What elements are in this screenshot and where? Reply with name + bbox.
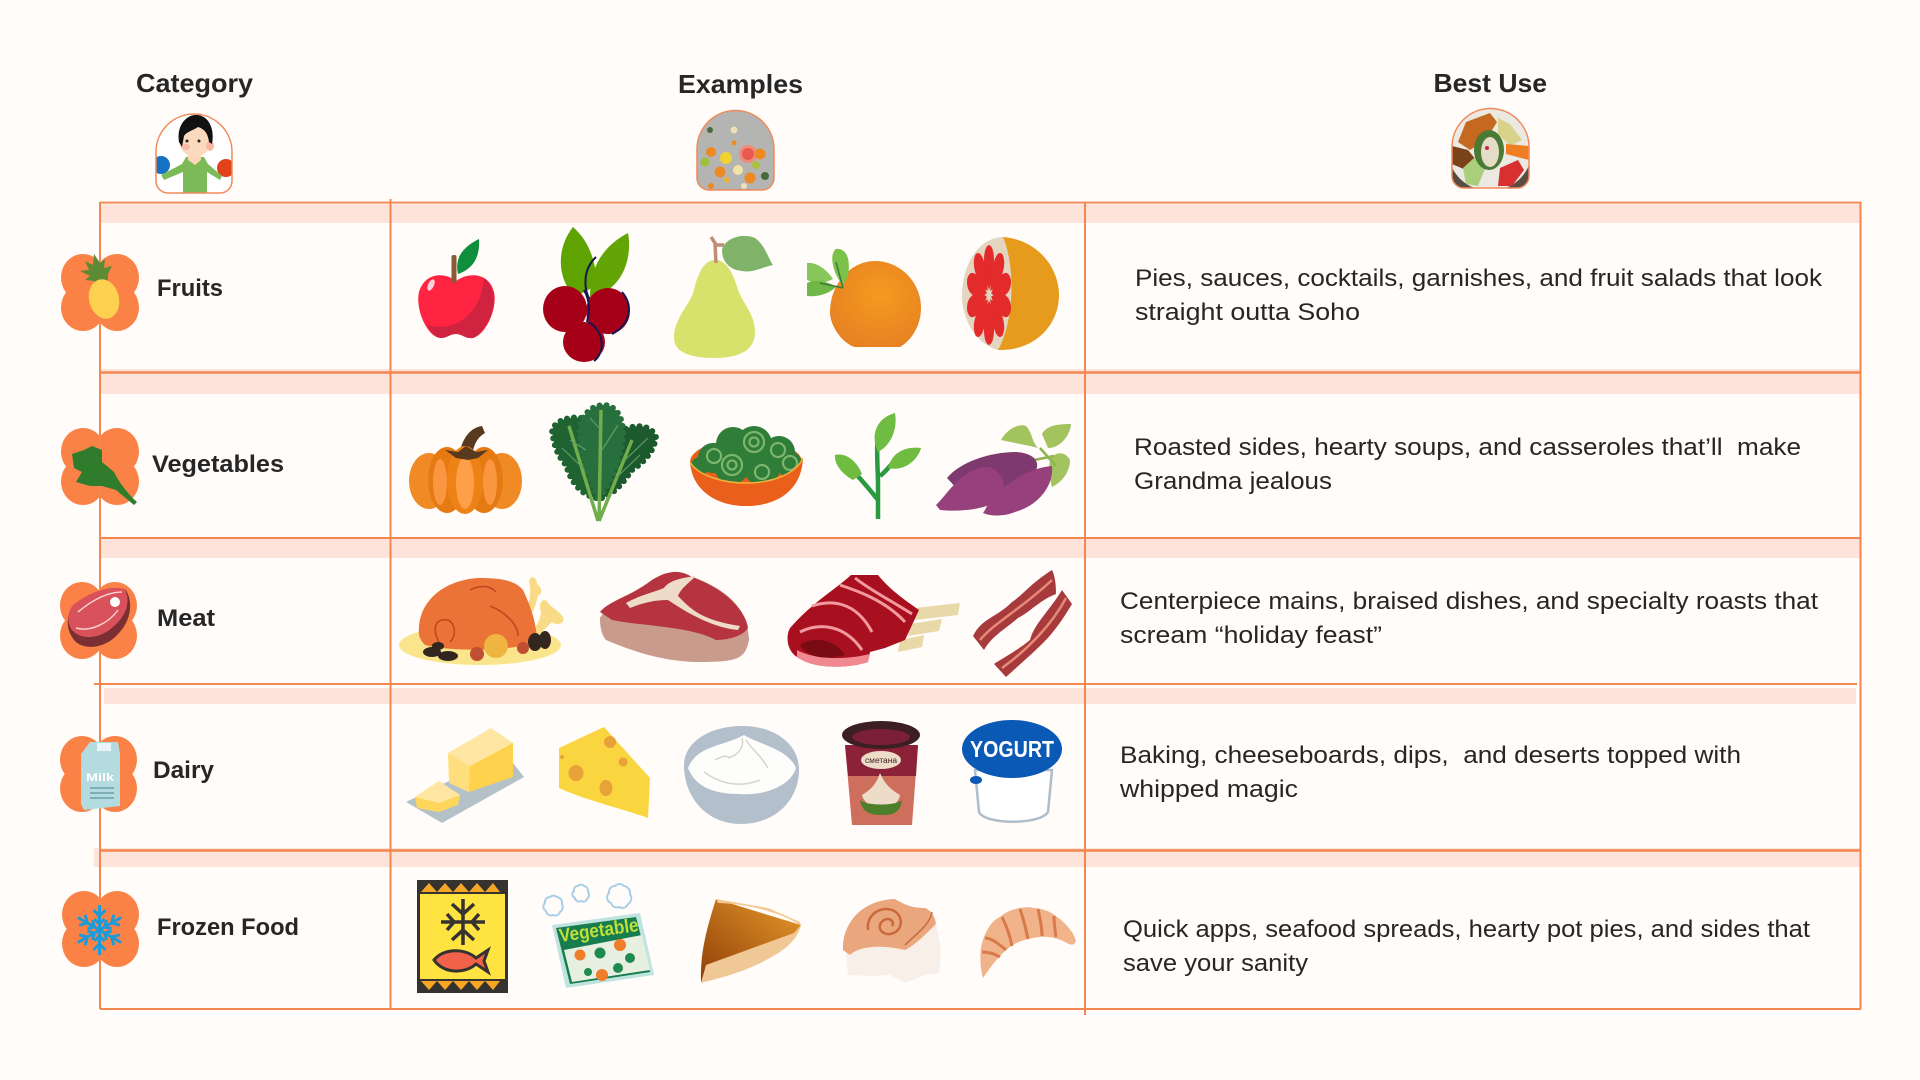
icon: croissant xyxy=(980,907,1076,978)
best use: dairy: whipped magic xyxy=(1119,776,1298,803)
examples: frozen food xyxy=(417,880,1076,993)
icon: leafy greens in orange flower xyxy=(61,428,139,505)
best use: fruits: Pies, sauces, cocktails, garnishes, and fruit salads that look xyxy=(1135,265,1823,292)
examples: dairy xyxy=(406,720,1062,825)
icon: sweet potatoes with leaves xyxy=(936,424,1071,516)
header: Best Use xyxy=(1434,68,1547,191)
panel: Fruits row xyxy=(61,227,1823,362)
best use: fruits xyxy=(1135,265,1823,326)
icon: green pear xyxy=(674,236,773,358)
icon: yogurt cup xyxy=(962,720,1062,822)
label: Frozen Food: Frozen Food xyxy=(157,914,299,941)
icon: snowflake in orange flower xyxy=(62,891,139,967)
icon: green sprout xyxy=(835,413,921,519)
header: Examples xyxy=(678,69,803,190)
icon: kale leaves xyxy=(552,405,656,521)
examples: vegetables xyxy=(409,405,1071,521)
icon: frozen vegetable bag with steam xyxy=(543,884,654,988)
heading: Best Use: Best Use xyxy=(1434,68,1547,98)
header: Category xyxy=(136,68,254,193)
icon: steak in orange flower xyxy=(60,582,137,659)
panel: Meat row xyxy=(60,570,1818,677)
label: Dairy: Dairy xyxy=(153,757,215,784)
best use: vegetables xyxy=(1134,434,1801,495)
heading: Examples: Examples xyxy=(678,69,803,99)
icon: rack of ribs xyxy=(788,575,960,667)
table grid xyxy=(94,199,1861,1015)
label: Fruits: Fruits xyxy=(157,275,223,302)
icon: frozen fish package xyxy=(417,880,508,993)
icon: bowl of sour cream xyxy=(684,726,799,824)
icon: halved grapefruit xyxy=(962,237,1059,350)
icon: pineapple in orange flower xyxy=(61,254,139,331)
best use: dairy xyxy=(1119,742,1741,803)
panel: Dairy row xyxy=(60,720,1741,825)
best use: meat: Centerpiece mains, braised dishes, and specialty roasts that xyxy=(1120,588,1818,615)
icon: cinnamon roll xyxy=(843,899,941,983)
icon: person holding two balls xyxy=(152,114,235,193)
icon: bacon strips xyxy=(973,570,1072,677)
icon: t-bone steak xyxy=(600,572,749,662)
icon: pumpkin pie slice xyxy=(701,899,801,983)
icon: orange with leaves xyxy=(807,249,921,347)
best use: fruits: straight outta Soho xyxy=(1135,299,1360,326)
panel: Vegetables row xyxy=(61,405,1801,521)
panel: Frozen Food row xyxy=(62,880,1810,993)
best use: vegetables: Roasted sides, hearty soups, and casseroles that’ll make xyxy=(1134,434,1801,461)
icon: roast turkey on platter xyxy=(399,577,564,665)
best use: frozen food: save your sanity xyxy=(1123,950,1308,977)
icon: red berries with leaves xyxy=(543,227,630,362)
best use: meat: scream “holiday feast” xyxy=(1120,622,1382,649)
icon: pumpkin xyxy=(409,426,522,514)
examples: fruits xyxy=(418,227,1059,362)
icon: tub of smetana xyxy=(842,721,920,825)
icon: frozen vegetable bag with steam: Vegetable xyxy=(558,915,640,947)
label: Meat: Meat xyxy=(157,605,215,632)
icon: milk carton in orange flower xyxy=(60,736,137,812)
best use: frozen food: Quick apps, seafood spreads, hearty pot pies, and sides that xyxy=(1123,916,1810,943)
examples: meat xyxy=(399,570,1072,677)
heading: Category: Category xyxy=(136,68,254,98)
icon: butter on tray xyxy=(406,728,524,823)
icon: citrus fruit flat lay xyxy=(697,110,774,190)
icon: cheese wedge xyxy=(559,727,650,818)
best use: vegetables: Grandma jealous xyxy=(1134,468,1332,495)
icon: salad plate xyxy=(1448,108,1532,191)
icon: red apple xyxy=(418,239,495,338)
icon: milk carton in orange flower: Milk xyxy=(86,772,115,784)
icon: yogurt cup: YOGURT xyxy=(970,736,1054,762)
icon: orange bowl of greens xyxy=(690,426,803,506)
label: Vegetables: Vegetables xyxy=(152,451,284,478)
icon: tub of smetana: сметана xyxy=(865,756,898,765)
best use: frozen food xyxy=(1123,916,1810,977)
best use: meat xyxy=(1120,588,1818,649)
best use: dairy: Baking, cheeseboards, dips, and deserts topped with xyxy=(1120,742,1741,769)
